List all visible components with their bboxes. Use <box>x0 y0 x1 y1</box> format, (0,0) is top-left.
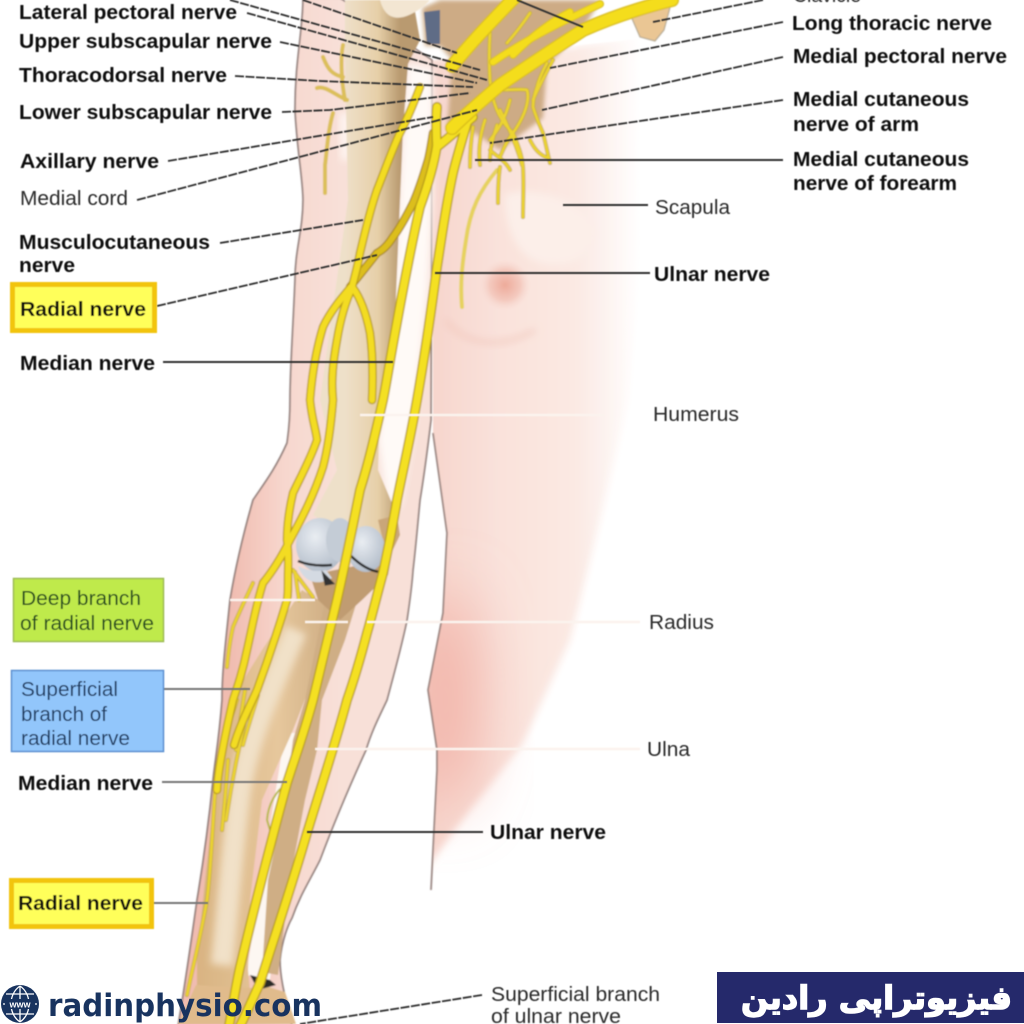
label: medial cutaneous nerve of forearm: Medial cutaneous <box>793 149 969 171</box>
forearm white gap <box>246 733 300 980</box>
label: superficial branch of ulnar nerve: Superficial branch <box>491 984 660 1006</box>
label: upper subscapular nerve: Upper subscapular nerve <box>19 31 272 53</box>
callout: radial nerve upper: Radial nerve <box>20 299 146 321</box>
label: humerus: Humerus <box>653 404 739 426</box>
callout: deep branch of radial nerve: Deep branch <box>21 588 141 610</box>
label: ulnar nerve lower: Ulnar nerve <box>490 822 606 844</box>
label: medial pectoral nerve: Medial pectoral nerve <box>793 46 1007 68</box>
wrist and hand bones <box>178 975 296 1024</box>
label: musculocutaneous nerve: Musculocutaneous <box>19 232 210 254</box>
label: radius: Radius <box>649 612 714 634</box>
small white gap at upper arm <box>340 113 350 160</box>
icon: globe: www <box>8 1000 31 1010</box>
callout: radial nerve lower <box>12 880 152 926</box>
callout: deep branch of radial nerve: of radial nerve <box>20 613 154 635</box>
label: ulnar nerve upper: Ulnar nerve <box>654 264 770 286</box>
callout: superficial branch of radial nerve: radial nerve <box>21 728 130 750</box>
right labels <box>490 0 1007 1024</box>
torso outline <box>428 433 447 890</box>
label: long thoracic nerve: Long thoracic nerve <box>792 13 992 35</box>
shoulder bone and plexus backdrop <box>380 0 672 150</box>
label: median nerve upper: Median nerve <box>20 353 155 375</box>
label: medial cutaneous nerve of forearm <box>793 149 969 195</box>
label: medial cutaneous nerve of arm: Medial cutaneous <box>793 89 969 111</box>
elbow joint <box>296 515 400 620</box>
callout: superficial branch of radial nerve: Superficial <box>21 679 118 701</box>
callout: radial nerve upper <box>12 284 154 330</box>
logo: Radin Physio <box>717 972 1024 1023</box>
label: medial cutaneous nerve of arm: nerve of arm <box>793 114 919 136</box>
label: medial cutaneous nerve of arm <box>793 89 969 136</box>
torso skin <box>428 42 622 864</box>
arm skin <box>178 0 432 1024</box>
label: lateral pectoral nerve: Lateral pectoral nerve <box>19 2 237 24</box>
logo: Radin Physio: فیزیوتراپی رادین <box>741 979 1012 1017</box>
radius bone <box>197 590 335 993</box>
callout: radial nerve lower: Radial nerve <box>18 893 143 915</box>
humerus bone <box>313 0 420 545</box>
callout: superficial branch of radial nerve <box>12 670 164 752</box>
white gap between humerus and torso <box>378 64 433 515</box>
website address: radinphysio.com <box>48 988 322 1024</box>
nerves <box>187 0 672 1024</box>
callout: superficial branch of radial nerve: branch of <box>21 704 107 726</box>
radius highlight <box>222 630 296 965</box>
icon: globe <box>1 985 39 1023</box>
label: axillary nerve: Axillary nerve <box>20 151 159 173</box>
label: thoracodorsal nerve: Thoracodorsal nerve <box>19 65 227 87</box>
leader lines <box>128 0 783 1024</box>
scapula and breast shading <box>445 192 595 342</box>
ulna bone <box>262 585 362 975</box>
label: medial cutaneous nerve of forearm: nerve of forearm <box>793 173 957 195</box>
label: lower subscapular nerve: Lower subscapular nerve <box>19 102 272 124</box>
label: median nerve lower: Median nerve <box>18 773 153 795</box>
website footer <box>1 985 322 1024</box>
label: scapula: Scapula <box>655 197 731 219</box>
label: ulna: Ulna <box>647 739 691 761</box>
label: medial cord: Medial cord <box>20 188 128 210</box>
label: musculocutaneous nerve: nerve <box>19 255 75 277</box>
label: superficial branch of ulnar nerve <box>491 984 660 1024</box>
left labels <box>12 2 272 926</box>
anatomy illustration <box>178 0 672 1024</box>
label: musculocutaneous nerve <box>19 232 210 277</box>
callout: deep branch of radial nerve <box>14 578 164 642</box>
